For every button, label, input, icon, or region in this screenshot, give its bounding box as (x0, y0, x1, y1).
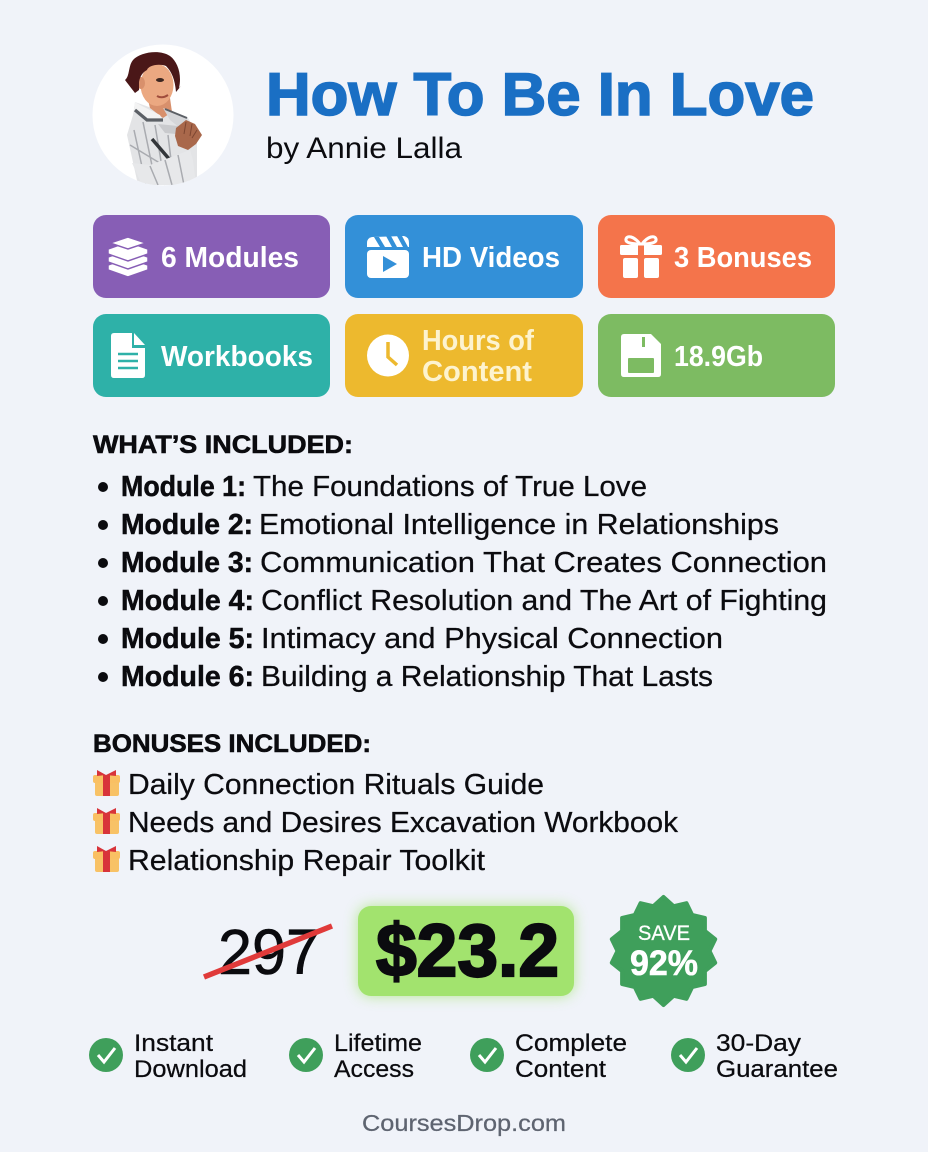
card label (422, 325, 534, 388)
feature card: 3 Bonuses (598, 215, 835, 298)
save badge (612, 897, 715, 1005)
module 1 row: Module 1: (121, 471, 246, 503)
perk: lifetime access: Lifetime (334, 1030, 422, 1057)
feature card: 18.9Gb: 18.9Gb (674, 341, 763, 373)
module 4 row: Module 4: (121, 585, 254, 617)
feature card: HD Videos (345, 215, 583, 298)
perk: instant download (89, 1030, 247, 1083)
heading: what's included: WHAT’S INCLUDED: (93, 431, 353, 459)
old price struck through: 297 (218, 916, 320, 988)
icon: gift box (620, 237, 662, 278)
perk: instant download: Instant (134, 1030, 213, 1057)
perk: 30-day guarantee (671, 1030, 838, 1083)
module 6 row: Building a Relationship That Lasts (261, 661, 713, 693)
perk: complete content: Content (515, 1056, 606, 1083)
feature card: 3 Bonuses: 3 Bonuses (674, 242, 812, 274)
perk: 30-day guarantee: 30-Day (716, 1030, 801, 1057)
icon: floppy disk (621, 334, 661, 377)
bonus 3 row: Relationship Repair Toolkit (128, 845, 485, 877)
module 5 row: Intimacy and Physical Connection (261, 623, 723, 655)
feature card: Workbooks (93, 314, 330, 397)
module 5 row: Module 5: (121, 623, 254, 655)
perk: instant download: Download (134, 1056, 247, 1083)
card label: Content (422, 356, 533, 388)
save badge: 92% (630, 944, 698, 983)
module 3 row: Module 3: (121, 547, 253, 579)
module 4 row: Conflict Resolution and The Art of Fighting (261, 585, 827, 617)
icon: clapperboard (367, 236, 409, 278)
icon: gift emoji (93, 846, 120, 872)
footer site name: CoursesDrop.com (362, 1110, 566, 1136)
perk: lifetime access: Access (334, 1056, 414, 1083)
icon: gift emoji (93, 770, 120, 796)
module 3 row: Communication That Creates Connection (260, 547, 827, 579)
heading: bonuses included: BONUSES INCLUDED: (93, 730, 371, 758)
module 6 row: Module 6: (121, 661, 254, 693)
feature card: 6 Modules: 6 Modules (161, 242, 299, 274)
feature card: 18.9Gb (598, 314, 835, 397)
feature card: Workbooks: Workbooks (161, 341, 313, 373)
header avatar: portrait of Annie Lalla (92, 44, 234, 186)
perk: complete content: Complete (515, 1030, 627, 1057)
icon: stacked books (108, 237, 148, 277)
feature card: Hours of Content (345, 314, 583, 397)
bonus 2 row: Needs and Desires Excavation Workbook (128, 807, 679, 839)
module 2 row: Emotional Intelligence in Relationships (259, 509, 779, 541)
save badge: SAVE (638, 922, 690, 945)
title: How To Be In Love (266, 61, 814, 128)
perk: complete content (470, 1030, 627, 1083)
icon: gift emoji (93, 808, 120, 834)
card label: Hours of (422, 325, 534, 357)
author byline: by Annie Lalla (266, 132, 462, 165)
current price box: $23.2 (376, 909, 559, 992)
module 1 row: The Foundations of True Love (253, 471, 647, 503)
icon: document (111, 333, 145, 378)
module 5 row (98, 623, 723, 655)
module 6 row (98, 661, 713, 693)
perk: 30-day guarantee: Guarantee (716, 1056, 838, 1083)
bonus 1 row: Daily Connection Rituals Guide (128, 769, 544, 801)
module list (98, 471, 827, 693)
feature card: HD Videos: HD Videos (422, 242, 560, 274)
icon: clock (367, 334, 409, 376)
module 1 row (98, 471, 647, 503)
bonus list (93, 769, 679, 877)
module 2 row: Module 2: (121, 509, 253, 541)
feature card: 6 Modules (93, 215, 330, 298)
perk: lifetime access (289, 1030, 422, 1083)
